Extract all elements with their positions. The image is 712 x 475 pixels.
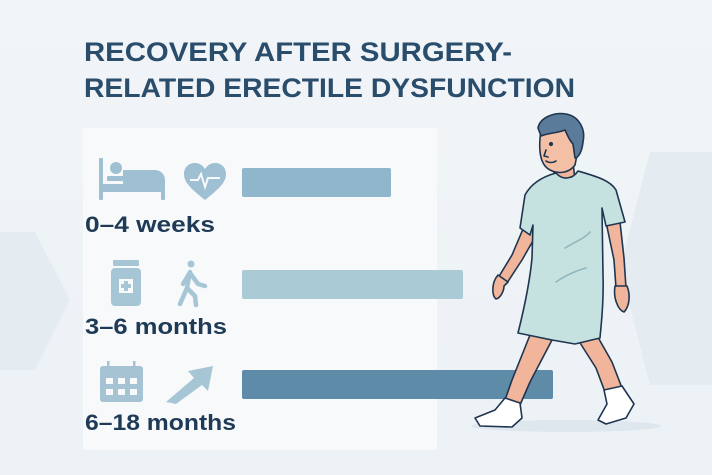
icon: heart — [184, 163, 226, 200]
head — [540, 124, 580, 172]
illustration: walking man in hospital gown — [471, 114, 661, 432]
icon: calendar — [100, 361, 143, 402]
bar 3 — [242, 370, 553, 399]
label 2: 3–6 months — [85, 314, 227, 339]
gown — [518, 171, 625, 344]
legs — [505, 335, 552, 405]
panel: timeline — [83, 128, 553, 450]
title: RECOVERY AFTER SURGERY- — [84, 37, 512, 67]
neck — [553, 162, 575, 180]
icon: walking person — [180, 260, 205, 305]
socks — [475, 398, 522, 427]
icon: rising arrow — [166, 366, 213, 404]
row 2: 3-6 months — [85, 260, 463, 339]
row 1: 0-4 weeks — [85, 158, 391, 237]
icon: medicine bottle — [111, 260, 141, 306]
label 3: 6–18 months — [85, 410, 236, 435]
label 1: 0–4 weeks — [85, 212, 215, 237]
title — [84, 37, 575, 103]
title: RELATED ERECTILE DYSFUNCTION — [84, 73, 575, 103]
arms — [498, 222, 538, 283]
row 3: 6-18 months — [85, 361, 553, 435]
bar 1 — [242, 168, 391, 197]
icon: bed — [99, 158, 165, 200]
bar 2 — [242, 270, 463, 299]
